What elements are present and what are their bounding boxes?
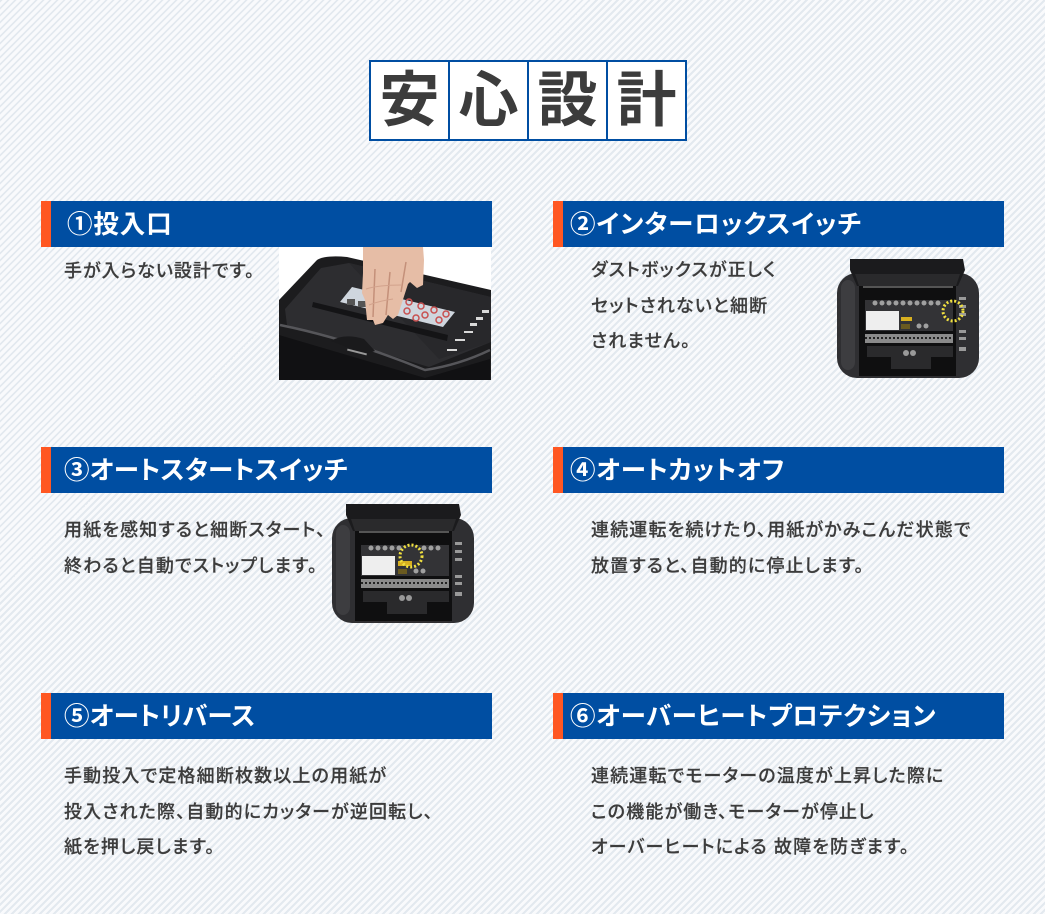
text: 1: 手が入らない設計です。 — [64, 261, 255, 281]
text: 4: 放置すると、自動的に停止します。 — [591, 556, 865, 576]
title: 安 — [380, 67, 440, 134]
text: 4 — [591, 520, 972, 576]
text: 6: オーバーヒートによる 故障を防ぎます。 — [591, 837, 910, 857]
text: 6: 連続運転でモーターの温度が上昇した際に — [591, 766, 944, 786]
text: 5: 手動投入で定格細断枚数以上の用紙が — [64, 766, 387, 786]
text: 5: 紙を押し戻します。 — [64, 837, 215, 857]
text: 6 — [591, 766, 944, 857]
text: 6: この機能が働き、モーターが停止し — [591, 802, 875, 822]
text: 5: 投入された際、自動的にカッターが逆回転し、 — [64, 802, 434, 822]
heading: 3: ③オートスタートスイッチ — [64, 457, 348, 485]
text: 2 — [591, 260, 777, 351]
photo: auto start switch — [332, 504, 474, 623]
heading: 1 — [41, 201, 492, 247]
text: 2: セットされないと細断 — [591, 296, 768, 316]
title — [369, 60, 687, 141]
photo: hand on slot — [279, 247, 491, 380]
text: 3 — [64, 520, 326, 576]
text: 4: 連続運転を続けたり、用紙がかみこんだ状態で — [591, 520, 972, 540]
heading: 2 — [553, 201, 1004, 247]
heading: 5: ⑤オートリバース — [64, 703, 255, 731]
text: 5 — [64, 766, 434, 857]
heading: 2: ②インターロックスイッチ — [570, 211, 862, 239]
heading: 3 — [41, 447, 492, 493]
heading: 5 — [41, 693, 492, 739]
heading: 6 — [553, 693, 1004, 739]
title: 心 — [458, 67, 518, 134]
heading: 4: ④オートカットオフ — [570, 457, 785, 485]
heading: 6: ⑥オーバーヒートプロテクション — [570, 703, 936, 731]
text: 2: されません。 — [591, 331, 691, 351]
title: 計 — [616, 67, 676, 134]
heading: 4 — [553, 447, 1004, 493]
text: 3: 終わると自動でストップします。 — [64, 556, 318, 576]
photo: interlock switch — [837, 259, 979, 378]
title: 設 — [538, 67, 598, 134]
text: 2: ダストボックスが正しく — [591, 260, 777, 280]
heading: 1: ①投入口 — [67, 211, 173, 239]
text: 3: 用紙を感知すると細断スタート、 — [64, 520, 326, 540]
